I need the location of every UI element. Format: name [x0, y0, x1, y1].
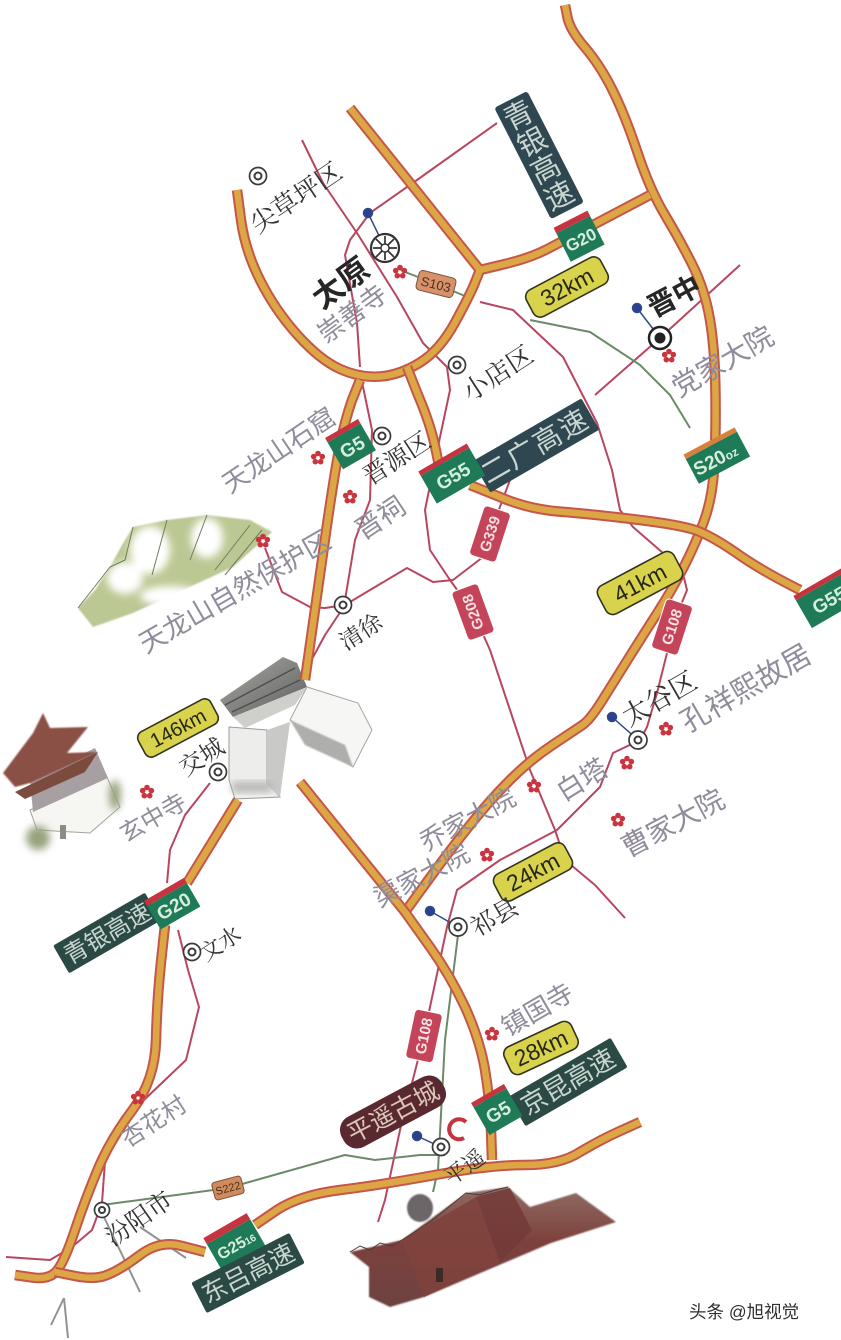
- pins: blue location markers: [364, 208, 660, 1147]
- place labels: 崇善寺: [312, 279, 393, 349]
- place labels: [100, 157, 817, 1252]
- shield: G55 east: [793, 567, 841, 628]
- km tag: 146km: 146km: [147, 705, 210, 753]
- route badge: S103: [415, 270, 457, 298]
- expressway label: 青银高速 north: 青: [498, 95, 539, 137]
- place labels: 孔祥熙故居: [675, 638, 817, 739]
- place labels: 乔家大院: [415, 782, 521, 857]
- expressway label: 东吕高速: 东吕高速: [198, 1239, 299, 1309]
- km tag: 32km: 32km: [536, 262, 598, 312]
- shield: G55: G55: [433, 459, 475, 495]
- expressway label: 青银高速 south: 青银高速: [59, 899, 156, 970]
- icon: Pingyao red arc: [449, 1119, 466, 1139]
- route badge: G208: G208: [459, 592, 488, 632]
- shield: G2516: [203, 1213, 266, 1271]
- place labels: 曹家大院: [616, 783, 730, 863]
- route badge: G339: [469, 505, 511, 563]
- watermark: 头条 @旭视觉: [689, 1302, 799, 1322]
- place labels: 渠家大院: [369, 838, 475, 913]
- route badge: G108 south: [405, 1009, 443, 1063]
- illustration: left temple tower: [3, 713, 121, 850]
- icons: district markers: [94, 168, 647, 1218]
- expressway label: 青银高速 north: 银: [512, 122, 553, 164]
- place labels: 白塔: [551, 753, 613, 807]
- place labels: 党家大院: [666, 320, 779, 403]
- route badge: S222: S222: [214, 1180, 242, 1198]
- route badge: G108 east: [651, 598, 693, 656]
- place labels: 杏花村: [117, 1091, 192, 1153]
- place labels: 太原: [306, 251, 376, 316]
- route badge: G108 east: G108: [659, 607, 686, 647]
- km tag: 24km: 24km: [502, 847, 564, 897]
- shield: S20: [683, 427, 750, 484]
- route badge: S222: [211, 1175, 245, 1201]
- km tag: 24km: [491, 840, 575, 904]
- place labels: 汾阳市: [100, 1186, 178, 1252]
- shield: G20 south: [144, 878, 200, 929]
- place labels: 天龙山石窟: [217, 401, 341, 499]
- shield: G5 north: G5: [337, 432, 369, 463]
- km tag: 41km: [595, 549, 685, 617]
- place labels: 晋祠: [350, 491, 411, 546]
- place labels: 交城: [175, 733, 230, 782]
- icon: Jinzhong city marker: [649, 327, 671, 349]
- place labels: 尖草坪区: [245, 157, 348, 239]
- expressway label: 青银高速 north: 速: [540, 176, 580, 218]
- shield: G5 south: [471, 1084, 522, 1135]
- km tag: 146km: [135, 696, 221, 760]
- expressway label: 二广高速: 二广高速: [476, 403, 595, 490]
- km tag: 41km: 41km: [609, 558, 671, 608]
- route badge: G208: [451, 583, 495, 641]
- shield: G2516: G2516: [215, 1228, 259, 1264]
- shield: G5 north: [325, 419, 376, 469]
- place labels: 天龙山自然保护区: [134, 525, 336, 659]
- shield: G20 north: [554, 211, 605, 262]
- illustration: Tianlong mountain: [78, 515, 272, 627]
- expressway label: 京昆高速: 京昆高速: [515, 1043, 621, 1121]
- place labels: 小店区: [457, 340, 539, 407]
- route badge: S103: S103: [419, 274, 452, 295]
- shield: G5 south: G5: [483, 1097, 515, 1128]
- place labels: 镇国寺: [496, 977, 579, 1042]
- place labels: 晋中: [642, 270, 706, 323]
- shield: G20 south: G20: [153, 889, 195, 925]
- icon: Taiyuan city wheel: [371, 234, 399, 262]
- expressway label: 青银高速 north: [494, 91, 584, 219]
- km tag: 28km: 28km: [510, 1024, 572, 1072]
- label: 平遥古城: 平遥古城: [343, 1077, 444, 1149]
- place labels: 清徐: [335, 609, 387, 655]
- route badge: G108 south: G108: [412, 1016, 437, 1056]
- place labels: 玄中寺: [116, 789, 191, 848]
- route badge: G339: G339: [477, 514, 504, 554]
- km tag: 32km: [523, 254, 611, 320]
- place labels: 平遥: [440, 1144, 490, 1190]
- icons: scenic spot flowers: [131, 265, 676, 1104]
- expressway label: 青银高速 north: 高: [525, 148, 566, 191]
- shield: S20: S20oz: [690, 440, 742, 481]
- illustration: fortress gate: [220, 657, 372, 799]
- shield: G20 north: G20: [563, 224, 600, 256]
- road network: thin roads: [6, 123, 740, 1338]
- km tag: 28km: [501, 1019, 581, 1077]
- place labels: 太谷区: [617, 666, 702, 732]
- place labels: 祁县: [466, 893, 523, 942]
- illustration: Pingyao city wall: [350, 1187, 616, 1307]
- place labels: 文水: [195, 921, 246, 966]
- shield: G55: [418, 444, 485, 504]
- place labels: 晋源区: [358, 427, 436, 491]
